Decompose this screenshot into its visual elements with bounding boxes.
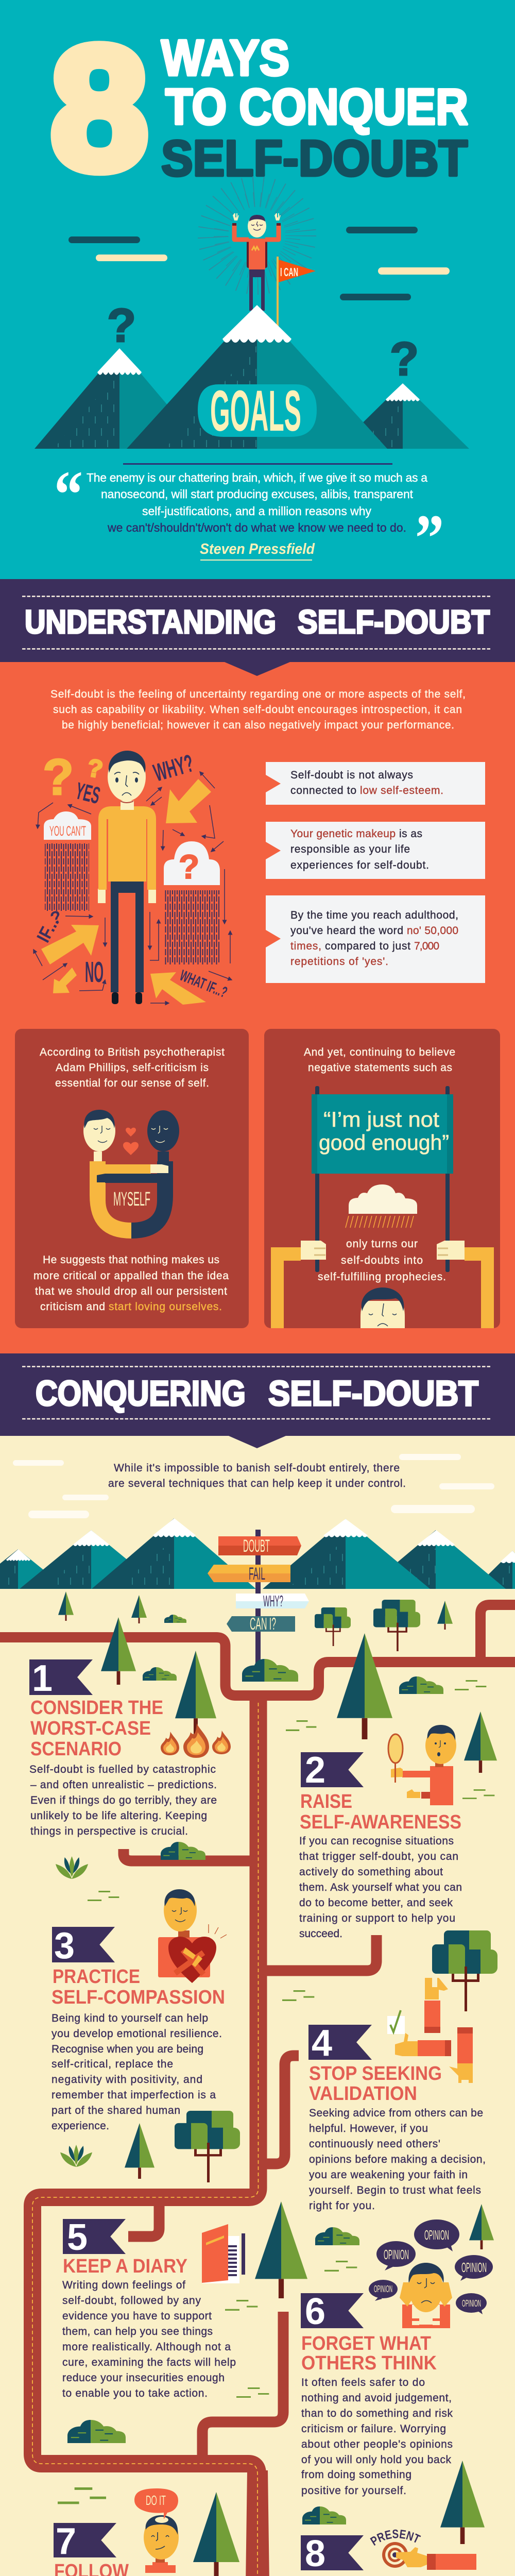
intro text [50,688,466,731]
sign: why [236,1592,309,1610]
fact: low self-esteem [266,762,485,805]
heading: SCENARIO [30,1738,122,1760]
quote text: The enemy is our chattering brain, which, if we give it so much as a [87,471,427,484]
body: them. Ask yourself what you can [299,1882,462,1893]
badge: goals: GOALS [210,379,301,443]
fact: no and yes: repetitions of 'yes'. [290,956,388,968]
heading: FORGET WHAT [301,2333,431,2354]
panel: fact boxes [266,762,485,983]
number flag 3 [52,1925,115,1967]
floating words: WHY? [150,750,197,787]
text: start loving ourselves: more critical or appalled than the idea [33,1270,229,1282]
sign: I'm just not good enough [312,1086,453,1272]
body: self-critical, replace the [52,2058,173,2070]
body: actively do something about [299,1866,443,1878]
body: unlikely to be life altering. Keeping [30,1810,207,1822]
panel: self-criticism [15,1029,249,1328]
speed lines [68,227,450,300]
sign: fail: FAIL [249,1564,265,1584]
text: negative statements: And yet, continuing to believe [304,1046,455,1058]
number flag 5: 5 [67,2217,88,2258]
body: part of the shared human [52,2105,180,2116]
fact: low self-esteem: Self-doubt is not always [290,769,413,781]
title: to conquer: TO CONQUER [165,78,468,135]
road network [0,1605,515,2576]
text: self-fulfilling: only turns our [346,1238,418,1250]
mountain range [0,1518,515,1589]
text: Adam Phillips: According to British psychotherapist [40,1046,225,1058]
rays behind climber [213,192,301,279]
text: self-fulfilling [318,1238,446,1283]
body: criticism or failure. Worrying [301,2423,446,2435]
icon: target and pointing hand: PRESENT [370,2530,421,2546]
body [299,1835,462,1940]
body: negativity with positivity, and [52,2074,202,2086]
panel: road landscape [0,1436,515,2576]
number flag 7: 7 [56,2521,76,2562]
icon: diary [202,2224,245,2283]
heading: SELF-COMPASSION [52,1987,225,2008]
sign: doubt [218,1536,301,1556]
fact: no and yes: 7,000 [414,940,439,952]
number flag 1: 1 [32,1658,53,1699]
sign: can I [227,1614,295,1633]
step 2: raise self-awareness [299,1725,462,1940]
icon: man with mirror [388,1725,456,1805]
fact: genetic makeup: is as [399,828,422,840]
body: self-doubt, followed by any [62,2295,201,2307]
number flag 2 [301,1750,364,1791]
doubtful man [98,751,156,1004]
intro text [108,1462,406,1489]
floating words: ? [48,907,64,929]
body: Even if things do go terribly, they are [30,1794,217,1806]
body: more realistically. Although not a [62,2341,231,2353]
number flag 8: 8 [305,2533,325,2574]
banner: understanding self-doubt: UNDERSTANDING [25,603,276,640]
thin arrows [33,772,232,1003]
body: from doing something [301,2469,411,2481]
text: start loving ourselves: He suggests that nothing makes us [43,1254,219,1266]
body: to enable you to take action. [62,2387,208,2399]
body: – and often unrealistic – predictions. [30,1779,217,1791]
intro text: be highly beneficial; however it can also negatively impact your performance. [62,719,454,731]
fact: genetic makeup: experiences for self-doubt. [290,859,429,871]
title: big 8: 8 [51,10,148,206]
body: remember that imperfection is a [52,2089,216,2101]
body: you develop emotional resilience. [52,2028,222,2040]
floating words: YES [73,777,103,809]
icon: head with do it cloud [134,2488,179,2573]
body: you are weakening your faith in [309,2169,468,2181]
fact: low self-esteem: low self-esteem. [360,785,443,796]
body: about other people's opinions [301,2438,453,2450]
heading [52,1966,225,2008]
quote text: self-justifications, and a million reasons why [142,504,372,518]
text: self-fulfilling: self-doubts into [341,1255,423,1266]
trees and bushes [38,1591,497,2576]
heading: CONSIDER THE [30,1697,163,1719]
number flag 5 [63,2217,126,2258]
number flag 4: 4 [312,2023,332,2064]
panel: self-fulfilling prophecies [264,1029,500,1328]
text: start loving ourselves [33,1254,229,1313]
sign: why: WHY? [263,1592,283,1610]
fact: no and yes: no' 50,000 [407,925,458,937]
heading: PRACTICE [53,1966,140,1988]
fact: genetic makeup [266,822,485,879]
body: than to do something and risk [301,2408,453,2419]
heading: WORST-CASE [30,1718,151,1739]
rain cloud: question [164,841,220,964]
intro text: are several techniques that can help keep it under control. [108,1478,406,1489]
icon: climber on summit [232,213,281,311]
floating words: NO [85,956,104,989]
heading: KEEP A DIARY [63,2256,187,2277]
title: ways: WAYS [161,29,289,86]
heading: RAISE [300,1791,352,1812]
text: Adam Phillips: Adam Phillips, self-criticism is [56,1062,209,1074]
body: continuously need others' [309,2138,440,2150]
body: opinions before making a decision, [309,2154,486,2165]
number flag 6: 6 [305,2291,325,2332]
intro text: such as capability or likability. When self-doubt encourages introspection, it can [53,704,462,716]
opinion bubbles [369,2219,493,2314]
heading [301,2333,437,2374]
body [301,2377,453,2497]
number flag 2: 2 [305,1750,325,1791]
number flag 4 [308,2023,372,2064]
body: Self-doubt is fuelled by catastrophic [29,1764,216,1775]
icon: man surrounded by opinions: OPINION [384,2247,409,2262]
body: yourself. Begin to trust what feels [309,2184,481,2196]
text: Adam Phillips [40,1046,225,1089]
sign: fail [208,1564,290,1584]
quote attribution: Steven Pressfield [200,541,315,557]
yellow arrows [41,779,211,1005]
yellow question marks: ? [43,749,74,805]
banner: understanding self-doubt: SELF-DOUBT [298,603,490,640]
heading [309,2063,442,2105]
step 7: follow your instinct [54,2488,228,2576]
illustration: doubtful man with arrows [32,749,232,1005]
heading: OTHERS THINK [301,2352,437,2374]
heading: VALIDATION [309,2083,417,2105]
step 4: stop seeking validation [308,1978,486,2212]
sign: I'm just not good enough: good enough” [319,1130,449,1155]
body: succeed. [299,1928,342,1940]
icon: flames [161,1723,231,1758]
body: positive for yourself. [301,2485,406,2497]
body: It often feels safer to do [301,2377,425,2388]
icon: rain cloud [346,1184,417,1228]
body: training or support to help you [299,1912,455,1924]
fact: no and yes: you've heard the word [290,925,403,937]
text: negative statements [304,1046,455,1074]
yellow question marks: ? [85,754,105,784]
icon: sad face [360,1287,405,1328]
text: negative statements: negative statements such as [308,1062,452,1074]
heading: STOP SEEKING [309,2063,442,2084]
banner: conquering self-doubt: CONQUERING [36,1374,246,1413]
number flag 8 [301,2533,364,2574]
intro text: Self-doubt is the feeling of uncertainty regarding one or more aspects of the self, [50,688,466,700]
sign: can I: CAN I? [250,1614,276,1633]
text: start loving ourselves: start loving ourselves. [109,1301,222,1313]
body: Seeking advice from others can be [309,2107,483,2119]
body: do to become better, and seek [299,1897,453,1909]
text: self-fulfilling: self-fulfilling prophecies. [318,1271,446,1283]
icon: man hugging heart [158,1889,227,1983]
quote marks [54,457,444,575]
fact: genetic makeup: responsible as your life [290,843,410,855]
yellow question marks [43,749,105,805]
icon: man surrounded by opinions: OPINION [462,2298,481,2309]
body: that trigger self-doubt, you can [299,1851,458,1862]
icon: I CAN flag [277,257,316,327]
body: If you can recognise situations [299,1835,454,1847]
illustration: embracing self [83,1110,179,1239]
fact: no and yes [266,895,485,983]
icon: question mark right: ? [390,333,419,385]
panel: understanding section [0,579,515,1353]
fact: genetic makeup: Your genetic makeup [290,828,396,840]
text: start loving ourselves: that we should drop all our persistent [35,1285,227,1297]
quote text [87,471,427,534]
body: cure, examining the facts will help [62,2357,236,2368]
step 5: keep a diary [62,2217,245,2399]
banner: understanding self-doubt [0,579,515,676]
step 3: self-compassion [52,1889,227,2132]
title: self-doubt: SELF-DOUBT [161,130,468,187]
step 1: worst-case scenario [29,1658,231,1837]
body: right for you. [309,2200,375,2212]
fact: no and yes: compared to just [325,940,410,952]
number flag 3: 3 [54,1925,75,1967]
badge: goals [198,379,317,443]
sign: I'm just not good enough: “I’m just not [323,1107,439,1131]
clouds [13,1454,494,1518]
intro text: While it's impossible to banish self-doubt entirely, there [114,1462,400,1474]
body: nothing and avoid judgement, [301,2392,452,2404]
heading [300,1791,461,1833]
heading [30,1697,163,1760]
banner: conquering self-doubt: SELF-DOUBT [268,1374,478,1413]
quote text: we can't/shouldn't/won't do what we know we need to do. [107,521,406,534]
body [309,2107,486,2212]
body: helpful. However, if you [309,2123,428,2134]
icon: question mark left: ? [107,299,136,352]
fact: no and yes: times, [290,940,321,952]
mountains [35,305,469,449]
body: of you will only hold you back [301,2454,451,2466]
floating words [32,750,230,1001]
quote marks: “ [54,457,83,532]
rain cloud: question: ? [179,848,199,886]
quote marks: ” [415,501,444,575]
step 6: forget what others think [301,2219,493,2497]
fact: low self-esteem: connected to [290,785,356,796]
signpost [208,1530,309,1680]
illustration: embracing self: MYSELF [113,1189,150,1210]
body: things in perspective is crucial. [30,1825,188,1837]
body: Recognise when you are being [52,2043,203,2055]
icon: head with do it cloud: DO IT [146,2493,166,2508]
body: Being kind to yourself can help [52,2012,208,2024]
text: start loving ourselves: criticism and [40,1301,105,1313]
rain cloud: you can't [44,811,91,911]
body [29,1764,217,1837]
panel: hero header [0,0,515,579]
body [52,2012,222,2132]
body [62,2279,236,2399]
text: Adam Phillips: essential for our sense of self. [55,1077,209,1089]
sign: doubt: DOUBT [243,1536,270,1556]
number flag 1 [29,1658,93,1699]
number flag 7 [54,2521,116,2562]
floating words: WHAT IF...? [177,967,230,1001]
icon: approving hands [387,1978,473,2083]
icon: man surrounded by opinions: OPINION [424,2227,449,2243]
banner: conquering self-doubt [0,1353,515,1436]
icon: target and pointing hand [370,2530,476,2570]
icon: man surrounded by opinions: OPINION [374,2284,392,2294]
number flag 6 [301,2291,364,2332]
body: reduce your insecurities enough [62,2372,225,2384]
step 8: focus on the present [301,2530,476,2576]
rain cloud: you can't: YOU CAN'T [49,823,86,839]
quote text: nanosecond, will start producing excuses, alibis, transparent [101,487,414,501]
body: evidence you have to support [62,2310,212,2322]
body: experience. [52,2120,109,2132]
icon: man surrounded by opinions [369,2219,493,2328]
fact: no and yes: By the time you reach adulthood, [290,909,458,921]
heading: SELF-AWARENESS [300,1811,461,1833]
body: them, can help you see things [62,2326,213,2337]
floating words: IF... [32,913,63,946]
hands holding the sign [271,1241,494,1328]
icon: I CAN flag: I CAN [280,265,298,279]
body: Writing down feelings of [62,2279,185,2291]
